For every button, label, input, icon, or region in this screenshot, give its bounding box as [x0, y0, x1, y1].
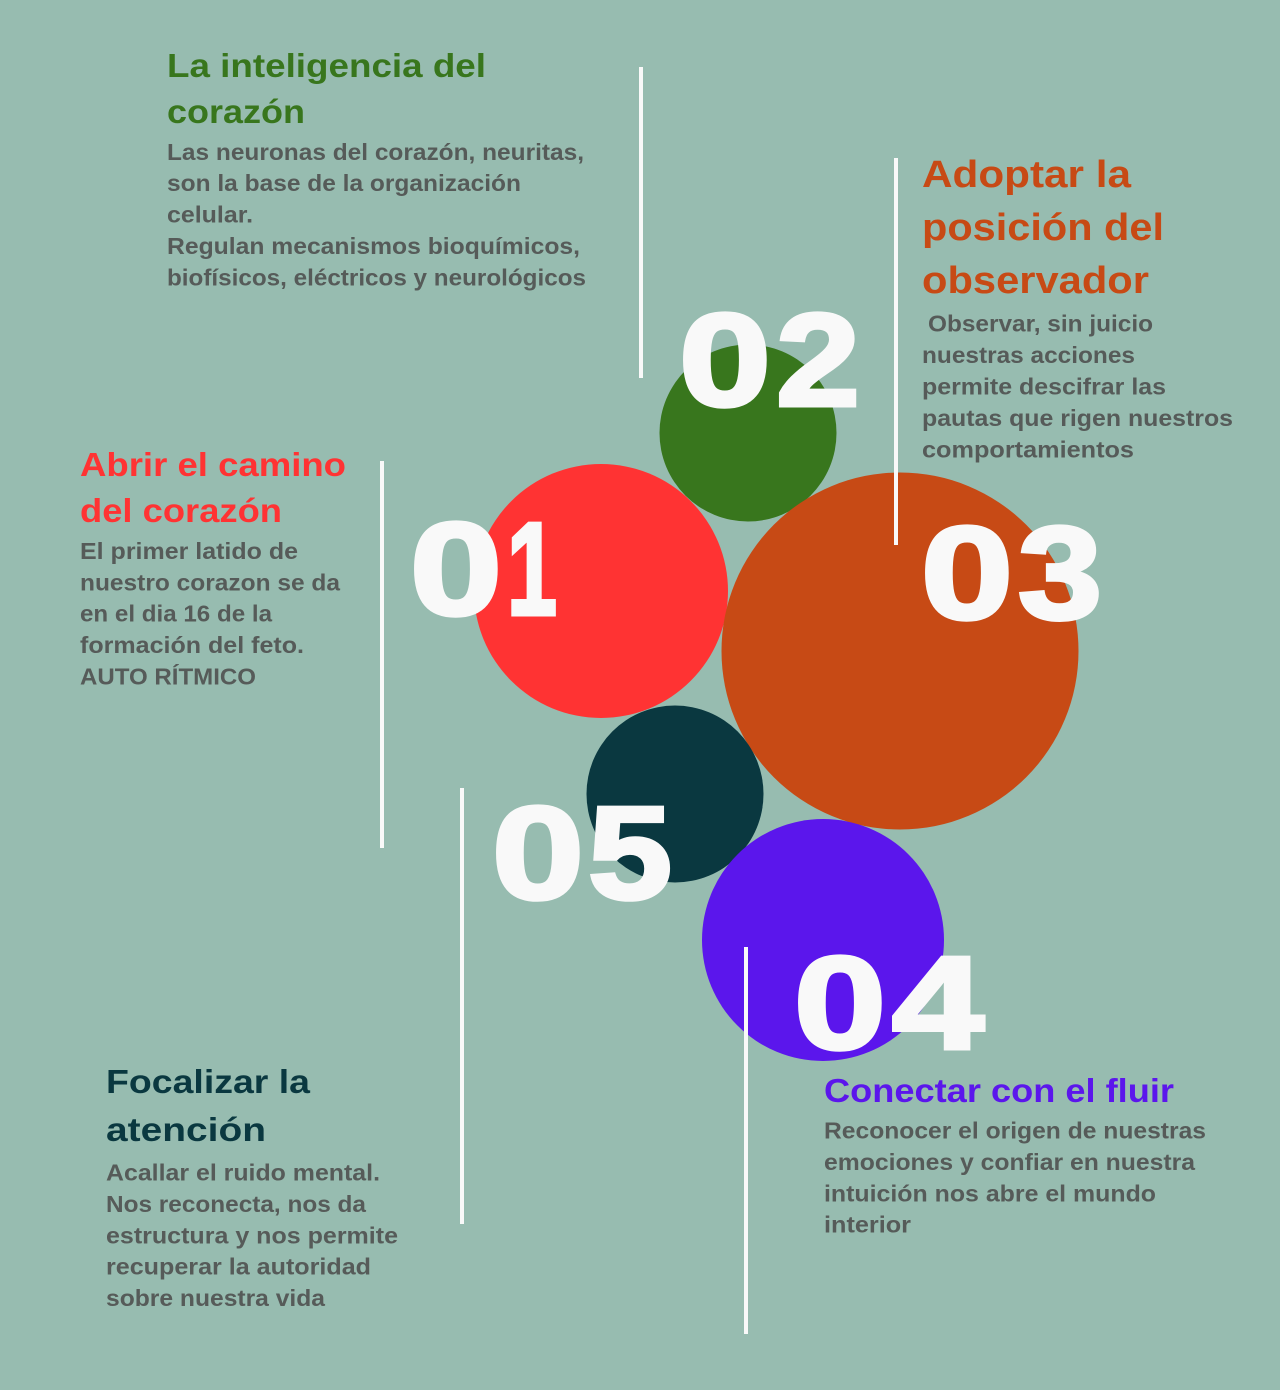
body: Focalizar la atención: recuperar la autoridad: [106, 1254, 371, 1280]
body: Focalizar la atención: estructura y nos permite: [106, 1222, 398, 1248]
heading: Conectar con el fluir: Conectar con el fluir: [824, 1072, 1174, 1109]
body: Focalizar la atención: sobre nuestra vida: [106, 1285, 325, 1311]
number 04: [794, 930, 984, 1076]
heading: Adoptar la posición del observador: posición del: [922, 207, 1164, 249]
heading: Adoptar la posición del observador: [922, 154, 1164, 302]
body: Focalizar la atención: Nos reconecta, nos da: [106, 1191, 366, 1217]
body: Conectar con el fluir: interior: [824, 1212, 911, 1238]
heading: Focalizar la atención: atención: [106, 1111, 266, 1148]
number 03: 0: [921, 500, 1013, 646]
number 01: 0: [410, 496, 502, 642]
body: Abrir el camino del corazón: [80, 538, 340, 689]
number 02: 0: [679, 286, 771, 434]
body: Abrir el camino del corazón: AUTO RÍTMICO: [80, 662, 256, 689]
body: Abrir el camino del corazón: formación del feto.: [80, 632, 304, 658]
number 05: [492, 780, 672, 926]
body: La inteligencia del corazón: son la base de la organización: [167, 170, 521, 196]
body: Adoptar la posición del observador: nuestras acciones: [922, 342, 1135, 368]
number 01: [410, 496, 557, 642]
number 03: 3: [1018, 500, 1102, 646]
number 04: 4: [892, 930, 984, 1076]
heading: Focalizar la atención: [106, 1063, 311, 1148]
body: Abrir el camino del corazón: en el dia 16 de la: [80, 601, 272, 627]
body: Focalizar la atención: [106, 1159, 398, 1311]
text block: Focalizar la atención: [106, 1063, 398, 1311]
body: La inteligencia del corazón: biofísicos, eléctricos y neurológicos: [167, 264, 586, 290]
circle: step 2 green: [660, 344, 836, 522]
text block: Conectar con el fluir: [824, 1072, 1206, 1238]
body: Focalizar la atención: Acallar el ruido mental.: [106, 1159, 380, 1185]
body: Adoptar la posición del observador: [922, 311, 1233, 462]
circle: step 1 red: [474, 464, 728, 718]
body: Abrir el camino del corazón: El primer latido de: [80, 538, 298, 564]
number 02: 2: [776, 286, 860, 434]
body: Adoptar la posición del observador: Observar, sin juicio: [928, 311, 1153, 337]
circle: step 3 orange: [722, 472, 1078, 830]
body: Adoptar la posición del observador: comportamientos: [922, 436, 1134, 462]
text block: La inteligencia del corazón: [167, 47, 586, 290]
circle: step 4 purple: [702, 819, 944, 1061]
heading: La inteligencia del corazón: [167, 47, 486, 130]
body: Conectar con el fluir: emociones y confiar en nuestra: [824, 1149, 1195, 1175]
number 02: [679, 286, 860, 434]
body: Abrir el camino del corazón: nuestro corazon se da: [80, 569, 340, 595]
vertical line: step 1: [380, 461, 384, 848]
text block: Abrir el camino del corazón: [80, 446, 346, 689]
body: Conectar con el fluir: [824, 1118, 1206, 1238]
heading: Adoptar la posición del observador: observador: [922, 260, 1149, 302]
number 04: 0: [794, 930, 886, 1076]
body: Conectar con el fluir: intuición nos abre el mundo: [824, 1180, 1156, 1206]
body: Conectar con el fluir: Reconocer el origen de nuestras: [824, 1118, 1206, 1144]
number 05: 0: [492, 780, 584, 926]
number 05: 5: [588, 780, 672, 926]
heading: Abrir el camino del corazón: del corazón: [80, 492, 282, 529]
vertical line: step 3: [894, 158, 898, 545]
body: La inteligencia del corazón: celular.: [167, 201, 253, 227]
heading: Focalizar la atención: Focalizar la: [106, 1063, 311, 1100]
body: Adoptar la posición del observador: pautas que rigen nuestros: [922, 405, 1233, 431]
circle: step 5 dark teal: [586, 706, 764, 882]
vertical line: step 5: [460, 788, 464, 1224]
vertical line: step 2: [639, 67, 643, 378]
body: La inteligencia del corazón: [167, 139, 586, 290]
vertical line: step 4: [744, 947, 748, 1334]
heading: La inteligencia del corazón: La inteligencia del: [167, 47, 486, 84]
heading: Adoptar la posición del observador: Adoptar la: [922, 154, 1132, 196]
heading: Abrir el camino del corazón: Abrir el camino: [80, 446, 346, 483]
text block: Adoptar la posición del observador: [922, 154, 1233, 462]
body: Adoptar la posición del observador: permite descifrar las: [922, 373, 1166, 399]
heading: Abrir el camino del corazón: [80, 446, 346, 529]
number 01: 1: [507, 496, 557, 642]
body: La inteligencia del corazón: Regulan mecanismos bioquímicos,: [167, 233, 580, 259]
heading: La inteligencia del corazón: corazón: [167, 93, 305, 130]
body: La inteligencia del corazón: Las neuronas del corazón, neuritas,: [167, 139, 584, 165]
number 03: [921, 500, 1102, 646]
